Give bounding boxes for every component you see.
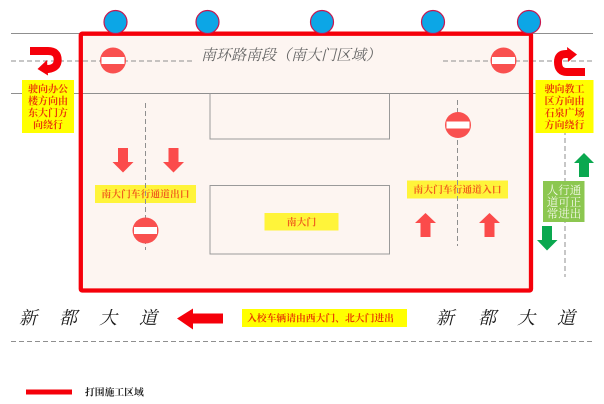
callout: right detour: 石泉广场 — [544, 106, 584, 120]
road name right: 新 — [436, 308, 457, 328]
label: entrance — [407, 180, 508, 198]
callout: left detour: 向绕行 — [33, 118, 63, 132]
callout: pedestrian passage — [543, 181, 584, 222]
road name left: 道 — [139, 308, 160, 328]
label: exit — [95, 185, 196, 203]
callout: right detour: 方向绕行 — [544, 118, 584, 132]
building outline south gate — [210, 186, 390, 254]
no entry signs — [100, 48, 516, 244]
callout: right detour — [536, 80, 594, 133]
building outline north — [210, 94, 390, 139]
road name right: 道 — [557, 308, 578, 328]
callout: campus vehicle entrance — [242, 309, 407, 327]
road name right: 大 — [517, 308, 537, 328]
icon: green up arrow — [574, 153, 594, 177]
callout: right detour: 驶向教工 — [544, 82, 584, 96]
legend — [26, 386, 144, 398]
callout: pedestrian passage: 道可正 — [547, 196, 582, 209]
road name right: 都 — [478, 308, 499, 328]
road name left: 大 — [99, 308, 119, 328]
road name left: 都 — [59, 308, 80, 328]
callout: left detour: 东大门方 — [28, 106, 68, 120]
label: exit: 南大门车行通道出口 — [101, 188, 190, 200]
icons: exit down arrows — [112, 148, 184, 172]
panel: construction area — [81, 34, 531, 290]
legend: 打围施工区域 — [85, 386, 144, 398]
road name right — [436, 308, 578, 328]
callout: right detour: 区方向由 — [544, 94, 584, 108]
callout: left detour — [22, 80, 74, 133]
label: south gate — [264, 213, 338, 230]
title: 南环路南段（南大门区域） — [201, 47, 381, 64]
road name left: 新 — [19, 308, 40, 328]
callout: campus vehicle entrance: 入校车辆请由西大门、北大门进出 — [247, 312, 394, 324]
road name left — [19, 308, 160, 328]
icon: green down arrow — [537, 226, 558, 250]
callout: left detour: 驶向办公 — [28, 82, 68, 96]
icon: red left arrow — [177, 308, 223, 330]
callout: left detour: 楼方向由 — [28, 94, 68, 108]
icon: left u-turn arrow — [30, 51, 58, 76]
blue circles along boundary — [104, 10, 540, 34]
label: south gate: 南大门 — [287, 216, 316, 228]
label: entrance: 南大门车行通道入口 — [413, 183, 502, 196]
callout: pedestrian passage: 常进出 — [547, 206, 581, 220]
red construction boundary — [81, 34, 531, 290]
icon: right u-turn arrow — [558, 47, 585, 72]
icons: entrance up arrows — [415, 213, 500, 237]
callout: pedestrian passage: 人行通 — [547, 184, 582, 197]
